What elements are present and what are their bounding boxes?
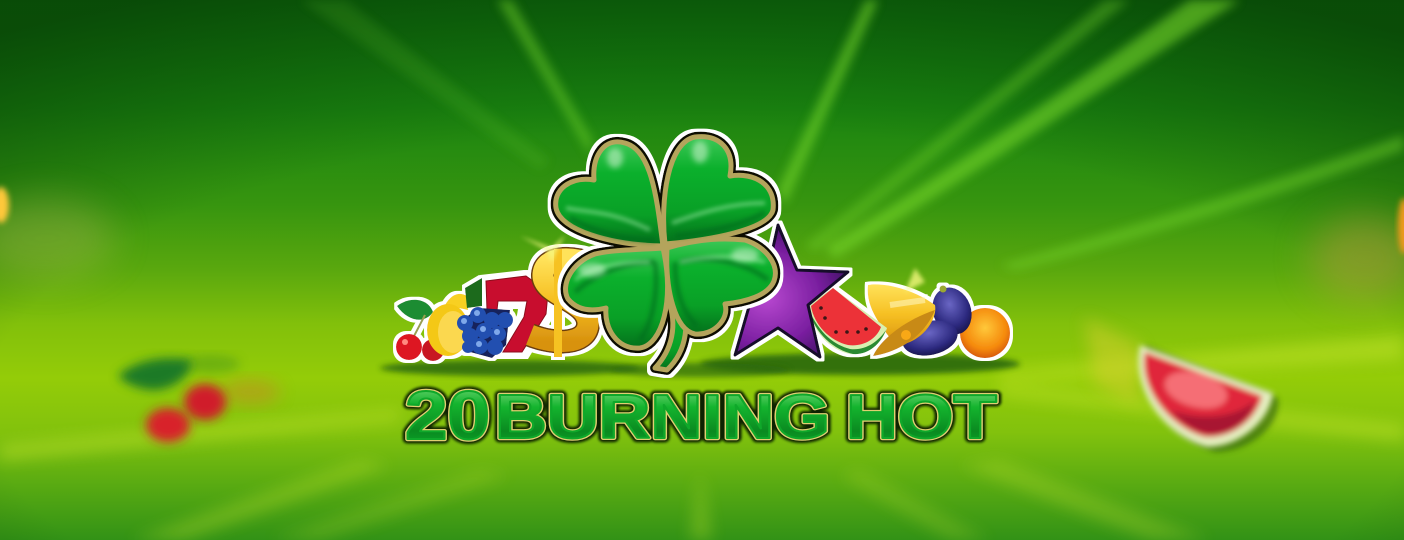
logo symbols: right group — [700, 225, 1010, 360]
logo ground shadow — [380, 353, 1020, 377]
title: HOT — [846, 383, 997, 452]
clover leaf: lower left — [566, 248, 668, 348]
icon: watermelon slice — [808, 288, 887, 354]
clover leaf: upper right — [664, 137, 773, 244]
icon: cherries — [396, 300, 444, 361]
logo symbols: left group — [396, 249, 592, 361]
title: BURNING — [495, 383, 830, 452]
icon: purple star — [700, 225, 848, 357]
icon: lemon — [427, 294, 469, 356]
title: 20 — [405, 377, 490, 454]
icon: four-leaf clover — [556, 137, 775, 370]
icon: plums — [899, 282, 978, 360]
title: 20 — [405, 377, 490, 454]
clover stem — [655, 300, 686, 370]
edge glow: left — [0, 187, 115, 278]
title: HOT — [846, 383, 997, 452]
clover leaf: lower right — [667, 239, 775, 334]
title — [405, 377, 997, 454]
clover highlights — [566, 203, 765, 280]
icon: golden bell — [868, 284, 935, 356]
icon: green leaf — [465, 278, 482, 308]
blurred cherries — [118, 355, 280, 442]
icon: red seven — [483, 273, 552, 356]
title: BURNING — [495, 383, 830, 452]
clover shading — [570, 212, 768, 340]
icon: grapes — [457, 307, 513, 358]
icon: dollar sign — [530, 249, 592, 357]
title: HOT — [846, 383, 997, 452]
blurred watermelon — [1085, 318, 1278, 452]
title: BURNING — [495, 383, 830, 452]
title: 20 — [405, 377, 490, 454]
clover leaf: upper left — [556, 142, 663, 246]
edge glow: right — [1310, 198, 1404, 300]
icon: sparkle — [520, 235, 925, 292]
icon: orange — [960, 308, 1010, 358]
